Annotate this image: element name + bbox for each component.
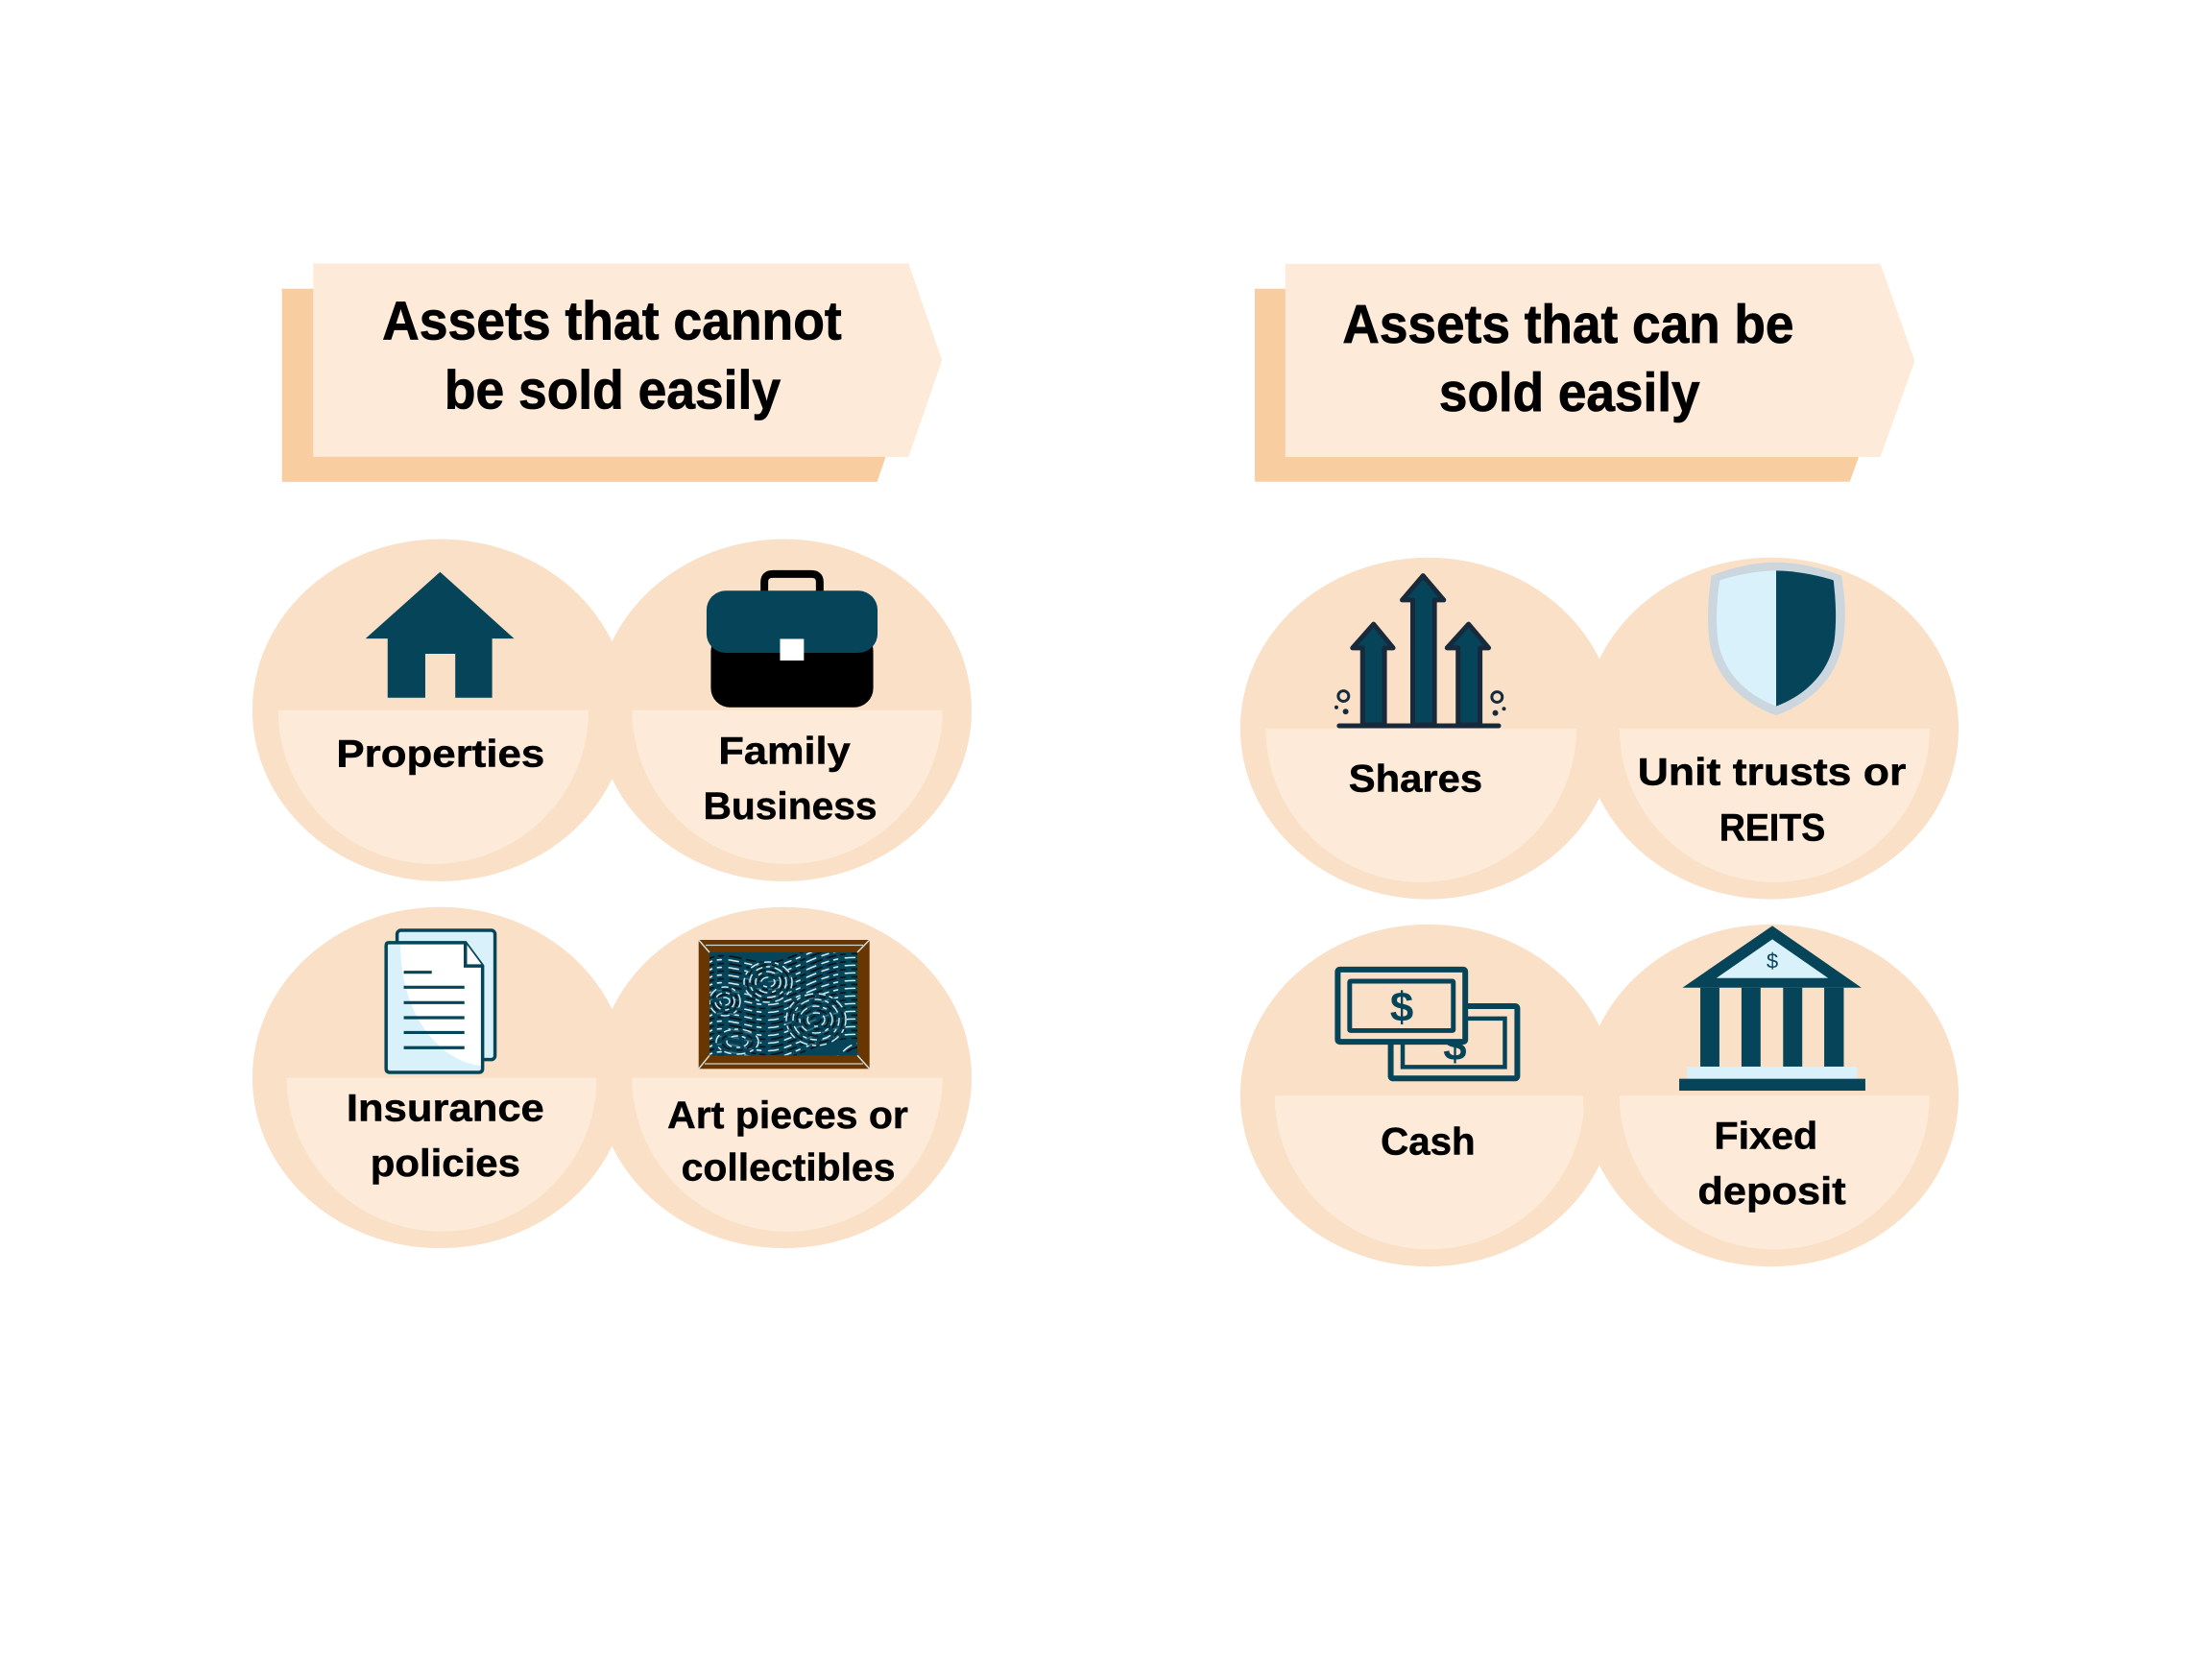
swirl backdrops [708, 961, 847, 1055]
icon: bank [1679, 926, 1865, 1091]
swirl strokes: dark [712, 965, 843, 1050]
card: art pieces or collectibles: collectibles [682, 1146, 895, 1189]
card: family business: Family [718, 730, 851, 772]
card: unit trusts or REITS [1583, 558, 1959, 900]
icon: framed painting [699, 938, 870, 1071]
flowing brush strokes: light layer [709, 952, 857, 1056]
icon: briefcase [707, 574, 878, 708]
icon: bank: $ [1767, 949, 1778, 973]
banner: assets that can be sold easily: sold easily [1439, 363, 1700, 423]
card: unit trusts or REITS: REITS [1719, 806, 1825, 849]
card: cash: Cash [1381, 1121, 1476, 1163]
card: fixed deposit: deposit [1697, 1170, 1846, 1213]
swirl strokes: light [709, 962, 846, 1054]
banner: assets that can be sold easily: Assets that can be [1342, 295, 1794, 355]
icon: banknotes: $ [1390, 984, 1413, 1031]
card: insurance policies: Insurance [347, 1088, 544, 1129]
card: cash [1240, 925, 1616, 1266]
flowing brush strokes: dark layer [709, 952, 857, 1056]
card: shares [1240, 558, 1616, 900]
icon: house [366, 572, 514, 698]
icon: rising arrows [1334, 576, 1505, 728]
icon: documents [386, 930, 495, 1072]
card: unit trusts or REITS: Unit trusts or [1638, 751, 1906, 793]
card: insurance policies: policies [371, 1142, 520, 1185]
card: family business: Business [703, 785, 878, 828]
icon: shield [1708, 563, 1845, 715]
banner: assets that cannot be sold easily: Assets that cannot [382, 291, 842, 351]
card: family business [596, 540, 972, 881]
banner: assets that cannot be sold easily: be sold easily [445, 361, 781, 421]
card: art pieces or collectibles [596, 907, 972, 1248]
card: fixed deposit [1583, 925, 1959, 1266]
icon: banknotes [1337, 970, 1517, 1078]
card: art pieces or collectibles: Art pieces or [667, 1094, 908, 1137]
card: insurance policies [252, 907, 628, 1248]
card: properties: Properties [336, 733, 544, 775]
icon: banknotes: $ [1443, 1023, 1467, 1070]
banner: assets that can be sold easily [1255, 264, 1914, 482]
banner: assets that cannot be sold easily [282, 263, 942, 482]
card: shares: Shares [1349, 757, 1482, 800]
card: fixed deposit: Fixed [1714, 1116, 1817, 1157]
card: properties [252, 540, 628, 881]
